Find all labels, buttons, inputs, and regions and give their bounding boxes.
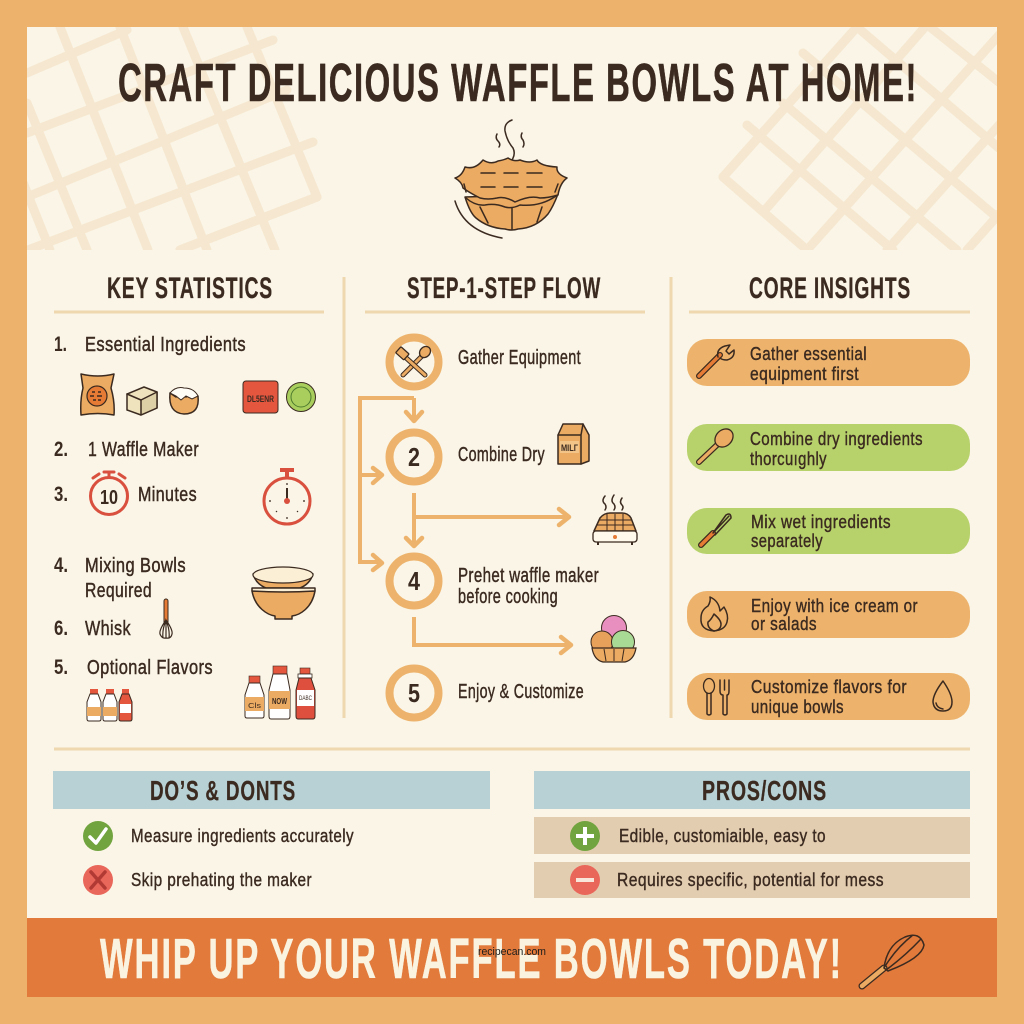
con row: Requires specific, potential for mess <box>617 869 884 890</box>
item 1: essential ingredients: 1. <box>54 333 67 356</box>
icon: ten minute timer <box>90 472 128 514</box>
insight: customize flavors: Customize flavors for <box>751 676 907 697</box>
item 4: mixing bowls: Required <box>85 580 152 602</box>
insight: mix wet ingredients: Mix wet ingredients <box>751 511 891 532</box>
do's header bar: DO’S & DONTS <box>150 775 296 806</box>
icon: ten minute timer: 10 <box>100 487 118 509</box>
step 1: gather equipment <box>390 338 581 386</box>
insight: enjoy with ice cream <box>687 591 970 638</box>
icon: milk carton <box>558 424 589 464</box>
item 5: optional flavors <box>54 656 213 679</box>
item 1: essential ingredients <box>54 333 246 356</box>
item 2: waffle maker: 2. <box>54 438 68 461</box>
pro row: Edible, customiaible, easy to <box>619 825 826 846</box>
icon: butter box <box>127 387 157 415</box>
step 2: combine dry: 2 <box>408 442 420 472</box>
heading: core insights: CORE INSIGHTS <box>749 272 911 305</box>
icon: small flavor bottles <box>87 689 132 721</box>
icon: large flavor bottles: DABC <box>299 696 313 702</box>
item 6: whisk: 6. <box>54 617 68 640</box>
icon: small whisk <box>160 601 172 638</box>
icon: large flavor bottles: NOW <box>272 697 287 706</box>
icon: ice cream bowl <box>591 616 636 662</box>
insight: mix wet ingredients: separately <box>751 530 823 551</box>
heading: step flow: STEP-1-STEP FLOW <box>407 272 601 305</box>
icon: stopwatch <box>264 470 310 524</box>
panel: pros and cons <box>534 771 970 898</box>
step 5: enjoy and customize <box>390 668 584 718</box>
don't: skip preheating <box>83 865 312 895</box>
insight: enjoy with ice cream: Enjoy with ice cream or <box>751 595 918 616</box>
icon: whisk <box>862 935 924 986</box>
icon: large flavor bottles: Cls <box>248 703 262 710</box>
do's header bar <box>53 771 490 809</box>
insight: combine dry ingredients: thorcuıghly <box>750 448 827 469</box>
item 6: whisk: Whisk <box>85 618 131 640</box>
insight: combine dry ingredients <box>687 424 970 471</box>
step 4: preheat waffle maker: Prehet waffle maker <box>458 565 599 587</box>
icon: red box <box>243 381 278 413</box>
footer banner <box>27 918 997 997</box>
icon: large flavor bottles <box>245 666 315 719</box>
insight: gather equipment <box>687 339 970 386</box>
step 4: preheat waffle maker <box>390 556 599 608</box>
icon: egg shell <box>170 388 198 414</box>
item 2: waffle maker: 1 Waffle Maker <box>88 439 199 461</box>
insight: combine dry ingredients: Combine dry ingredients <box>750 428 923 449</box>
item 4: mixing bowls: Mixing Bowls <box>85 555 186 577</box>
item 5: optional flavors: Optional Flavors <box>87 657 213 679</box>
item 6: whisk <box>54 617 131 640</box>
panel: core insights <box>687 339 970 720</box>
do: measure ingredients: Measure ingredients accurately <box>131 825 354 846</box>
icon: green plate <box>286 382 316 412</box>
panel: step flow <box>360 338 637 718</box>
item 2: waffle maker <box>54 438 199 461</box>
pros/cons header bar: PROS/CONS <box>702 775 827 806</box>
insight: mix wet ingredients <box>687 508 970 554</box>
step 1: gather equipment: Gather Equipment <box>458 347 581 369</box>
insight: gather equipment: Gather essential <box>750 343 867 364</box>
step 4: preheat waffle maker: before cooking <box>458 586 558 608</box>
step 5: enjoy and customize: Enjoy & Customize <box>458 681 584 703</box>
don't: skip preheating: Skip prehating the maker <box>131 869 312 890</box>
item 3: ten minutes: 3. <box>54 483 68 506</box>
insight: gather equipment: equipment first <box>750 363 859 384</box>
icon: waffle maker <box>593 495 637 545</box>
icon: milk carton: MILГ <box>561 443 578 453</box>
watermark: recipecan.com <box>478 946 546 958</box>
insight: enjoy with ice cream: or salads <box>751 613 817 634</box>
item 3: ten minutes: Minutes <box>138 484 197 506</box>
icon: red box: DL5ENR <box>247 394 274 404</box>
panel: do's and don'ts <box>53 771 490 895</box>
heading: key statistics: KEY STATISTICS <box>107 272 273 305</box>
pro row <box>534 817 970 854</box>
step 5: enjoy and customize: 5 <box>408 678 420 708</box>
item 3: ten minutes <box>54 483 197 506</box>
insight: customize flavors: unique bowls <box>751 696 844 717</box>
icon: flour bag <box>81 374 114 415</box>
item 5: optional flavors: 5. <box>54 656 68 679</box>
item 1: essential ingredients: Essential Ingredients <box>85 334 246 356</box>
pros/cons header bar <box>534 771 970 809</box>
con row <box>534 862 970 898</box>
panel: key statistics <box>54 333 316 721</box>
icon: waffle bowl with steam <box>455 120 567 238</box>
insight: customize flavors <box>687 673 970 720</box>
flow arrows <box>360 398 571 653</box>
waffle pattern background <box>10 27 1000 253</box>
icon: mixing bowls <box>252 567 315 619</box>
item 4: mixing bowls <box>54 554 186 602</box>
step 2: combine dry: Combine Dry <box>458 444 545 466</box>
step 2: combine dry <box>390 432 545 482</box>
do: measure ingredients <box>83 821 354 851</box>
item 4: mixing bowls: 4. <box>54 554 68 577</box>
step 4: preheat waffle maker: 4 <box>408 566 420 596</box>
